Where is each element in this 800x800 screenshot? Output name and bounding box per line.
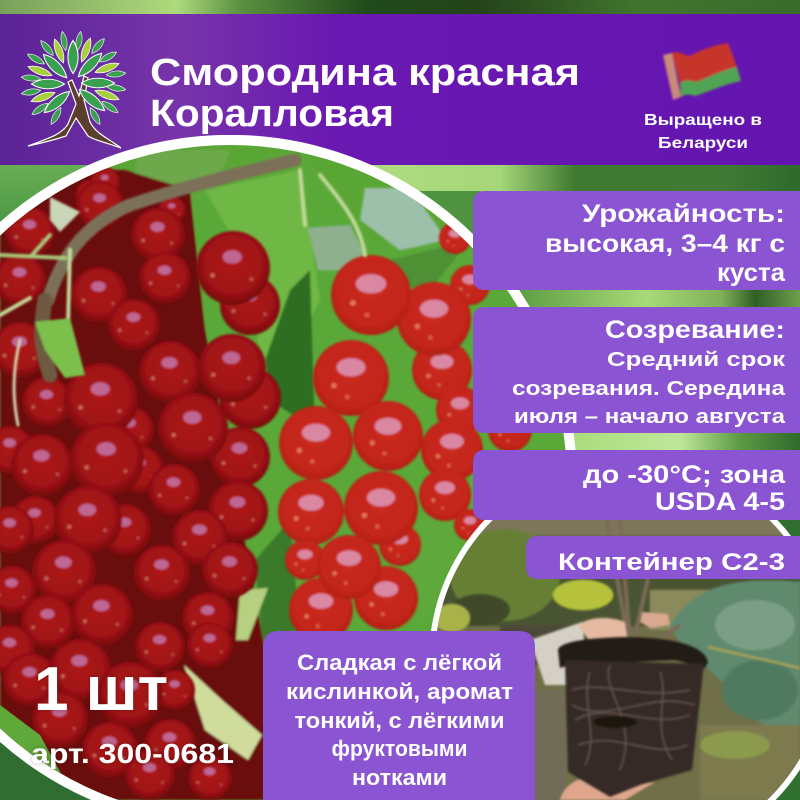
- leaf at the lower left edge: [0, 705, 61, 774]
- panel: taste description: нотками: [352, 765, 447, 790]
- panel: container size: Контейнер С2-3: [558, 549, 785, 576]
- header band: [0, 14, 800, 165]
- tree leaves: [21, 31, 126, 126]
- panel: container size: [526, 536, 800, 579]
- panel: frost hardiness: до -30°C; зона: [583, 461, 786, 489]
- panel: ripening: Созревание:: [605, 316, 785, 344]
- panel: frost hardiness: USDA 4-5: [655, 488, 785, 516]
- title: Смородина красная: [150, 52, 580, 94]
- panel: taste description: тонкий, с лёгкими: [294, 708, 504, 733]
- panel: yield: [473, 191, 800, 290]
- panel: taste description: фруктовыми: [332, 736, 468, 761]
- panel: ripening: июля – начало августа: [514, 406, 786, 428]
- panel: frost hardiness: [473, 450, 800, 520]
- made in Belarus label: Выращено в: [644, 112, 762, 129]
- panel: yield: куста: [717, 259, 786, 287]
- panel: yield: Урожайность:: [582, 200, 785, 228]
- panel: ripening: [473, 307, 800, 433]
- made in Belarus label: [644, 112, 762, 152]
- panel: taste description: [263, 631, 535, 800]
- photo: rooted plant in hand: [431, 520, 800, 800]
- photo: red currant circle: [0, 135, 576, 800]
- berries: left bunch: [0, 167, 281, 800]
- logo: tree: [21, 31, 126, 148]
- article number: арт. 300-0681: [31, 738, 234, 769]
- panel: yield: высокая, 3–4 кг с: [545, 230, 785, 258]
- plant stems: [606, 515, 680, 640]
- panel: taste description: Сладкая с лёгкой: [297, 650, 502, 675]
- panel: ripening: созревания. Середина: [512, 378, 786, 400]
- icon: Belarus flag: [663, 43, 741, 100]
- hand and sleeve: [530, 612, 670, 800]
- branch and stems: [0, 160, 365, 425]
- root ball: [558, 637, 708, 797]
- title: [150, 52, 580, 135]
- tree trunk: [28, 76, 121, 148]
- panel: ripening: Средний срок: [607, 349, 786, 371]
- quantity: 1 шт: [34, 655, 168, 724]
- title: Коралловая: [150, 93, 394, 135]
- panel: taste description: кислинкой, аромат: [286, 679, 513, 704]
- berries: right bunch: [278, 222, 532, 642]
- made in Belarus label: Беларуси: [658, 135, 748, 152]
